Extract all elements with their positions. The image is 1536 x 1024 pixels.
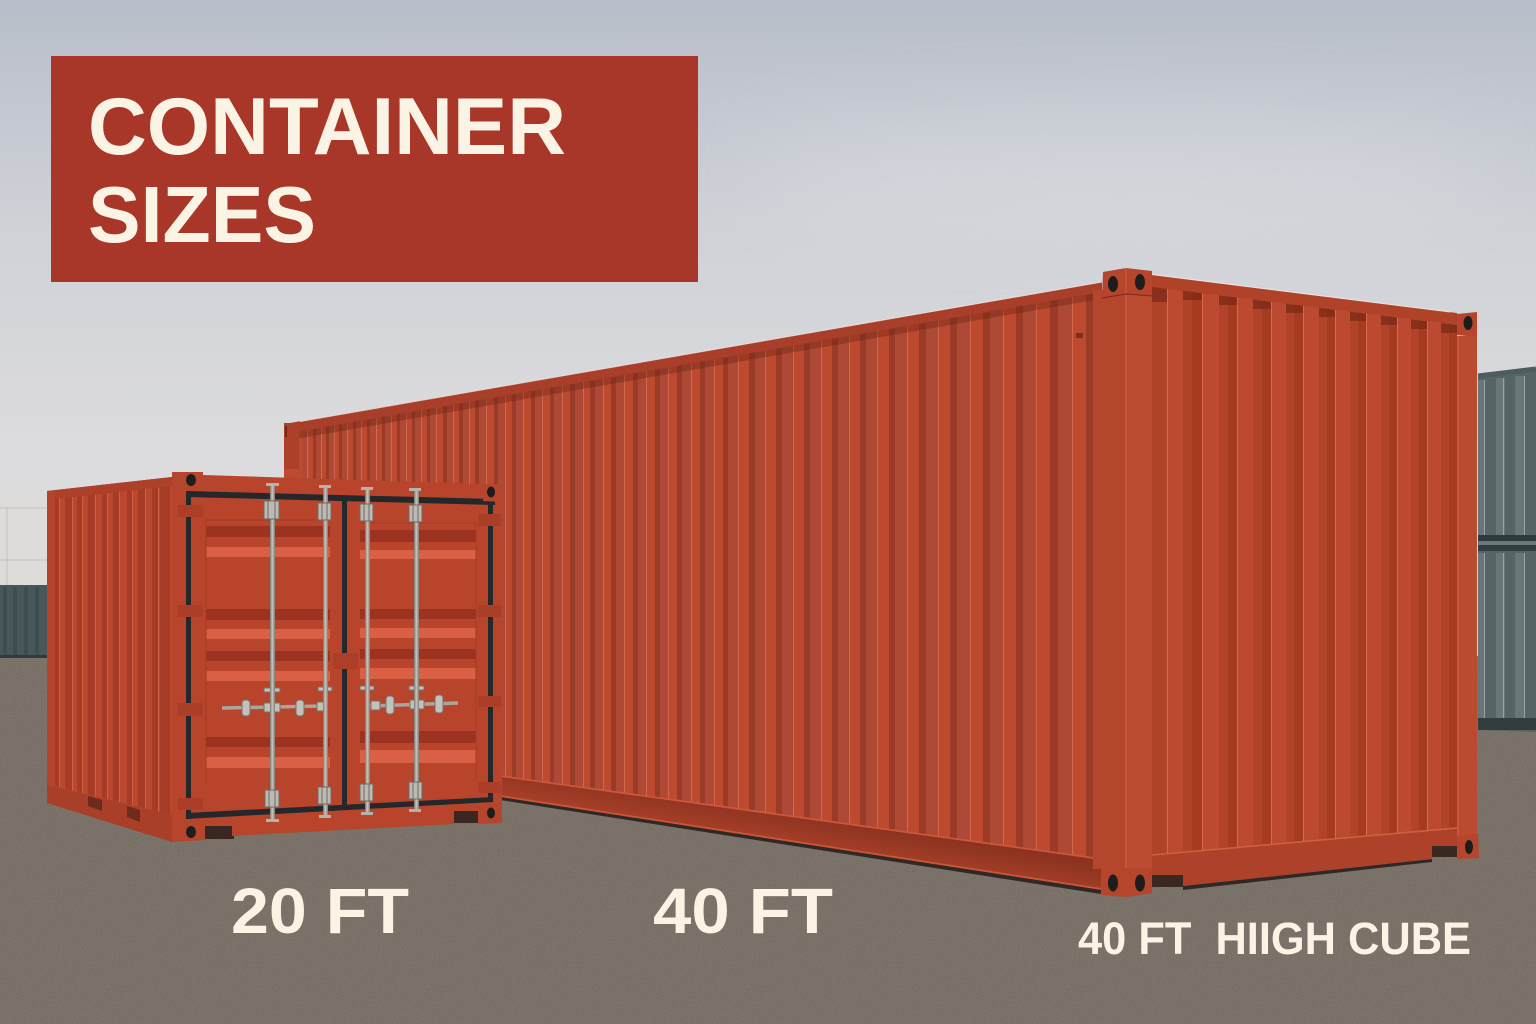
20 ft side top rail [47, 477, 172, 500]
door gasket [186, 491, 495, 819]
title text [88, 82, 566, 259]
background: right stacked grey containers [1478, 368, 1536, 732]
locking bar brackets [264, 501, 422, 807]
label: 40 ft: 40 FT [653, 875, 833, 947]
40 ft front corner post [1093, 288, 1152, 869]
20 ft side left post [47, 491, 55, 803]
40 ft top rail, end [1152, 274, 1457, 325]
horizontal lock handles [222, 703, 458, 708]
20 ft bottom left corner casting [172, 822, 204, 842]
40 ft top rail, long side [284, 282, 1102, 434]
vertical locking bars [270, 483, 419, 822]
container: 20 ft [47, 470, 502, 842]
20 ft side panel [47, 470, 172, 842]
label: 20 ft: 20 FT [231, 875, 409, 947]
20 ft top right corner casting [483, 484, 502, 502]
ground [0, 656, 1536, 1024]
title banner [51, 56, 698, 282]
locking bar caps [266, 483, 421, 822]
40 ft right corner post [1457, 336, 1477, 836]
container: 40 ft [284, 268, 1479, 910]
right hinges [478, 514, 501, 793]
title text: CONTAINER [88, 82, 566, 172]
20 ft bottom right corner casting [478, 806, 502, 824]
ground shadow under 40 ft container [500, 795, 1432, 894]
20 ft door face [172, 472, 502, 842]
handle cams [242, 686, 443, 716]
sky background [0, 0, 1536, 740]
center latch [333, 653, 358, 669]
label: 40 ft high cube: 40 FT HIIGH CUBE [1078, 913, 1471, 964]
left hinges [178, 505, 203, 810]
background: left white building [0, 495, 48, 586]
40 ft end panel [1152, 270, 1457, 870]
40 ft far top corner [284, 423, 299, 469]
40 ft long side panel [284, 294, 1093, 857]
20 ft side bottom rail with forklift pockets [47, 785, 172, 842]
40 ft right bottom corner casting [1457, 834, 1479, 859]
40 ft bottom rail, end [1150, 828, 1458, 887]
40 ft bottom rail, long side [500, 776, 1101, 889]
40 ft right top corner casting [1457, 312, 1477, 337]
title text: SIZES [88, 170, 316, 259]
background: left grey container [0, 585, 48, 658]
40 ft bottom corner casting with holes [1101, 868, 1152, 897]
left door stripes [206, 520, 330, 785]
20 ft top corner casting [172, 472, 203, 491]
right door stripes [360, 523, 476, 780]
40 ft top corner casting with holes [1102, 268, 1152, 298]
